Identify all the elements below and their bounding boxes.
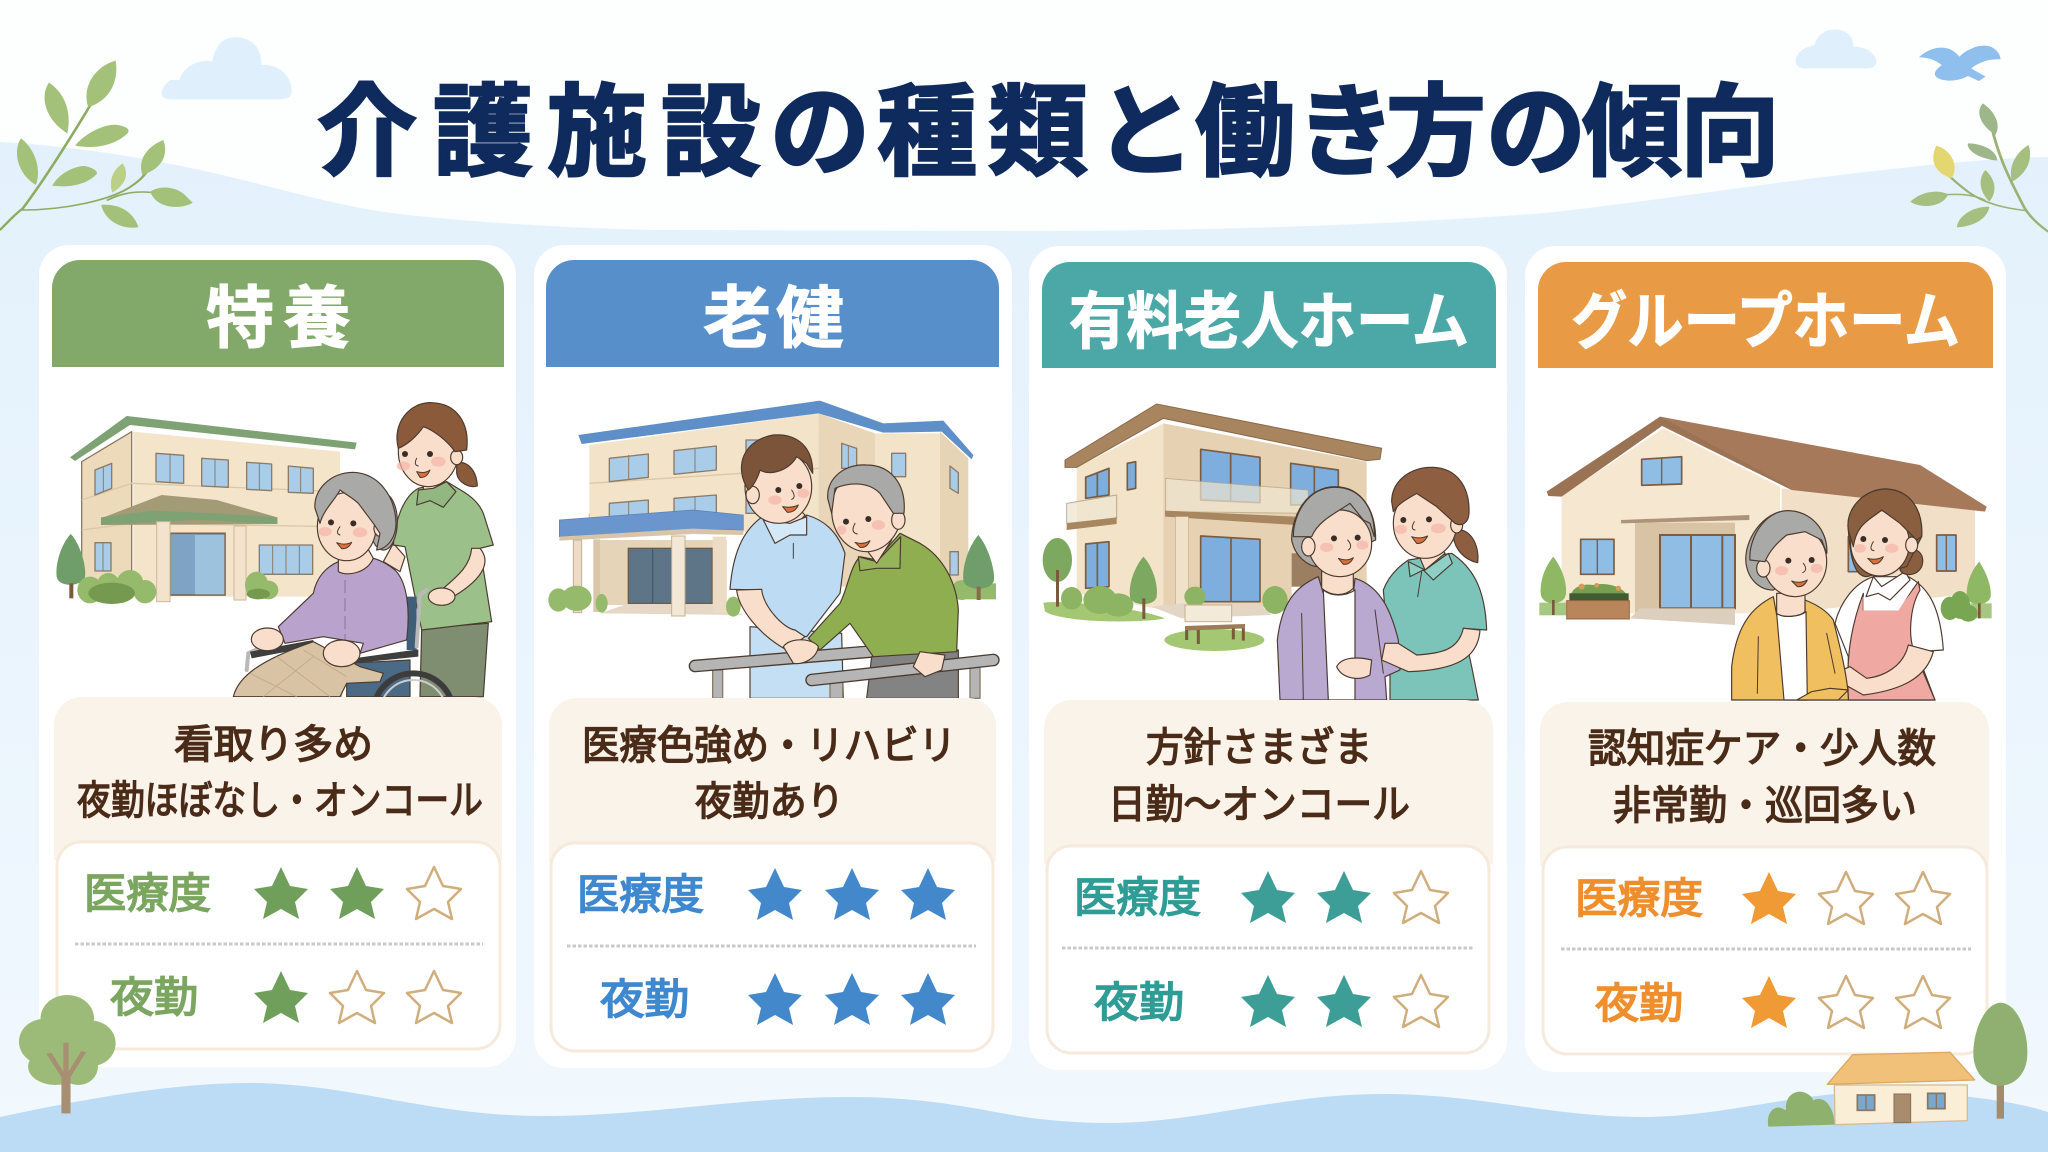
ratings: 老健: 医療度 — [577, 871, 704, 918]
description: 特養: 夜勤ほぼなし・オンコール — [77, 779, 483, 823]
icon: left branch — [0, 61, 193, 230]
panel: 老健 — [534, 245, 1012, 1068]
stars: 医療度 2/3 — [1241, 871, 1448, 923]
description: グループホーム — [1540, 702, 1989, 866]
heading: 有料老人ホーム: 有料老人ホーム — [1069, 288, 1469, 357]
description: グループホーム: 非常勤・巡回多い — [1613, 784, 1917, 828]
panel: グループホーム — [1525, 246, 2006, 1072]
icon: bird — [1919, 46, 2001, 81]
description: 有料老人ホーム — [1044, 700, 1493, 864]
title: 介護施設の種類と働き方の傾向 — [317, 77, 1780, 189]
stars: 医療度 2/3 — [254, 867, 461, 919]
illustration: 老健 building with therapist and elderly man — [548, 401, 996, 698]
heading: 特養 — [52, 260, 504, 367]
description: 有料老人ホーム: 日勤〜オンコール — [1108, 783, 1410, 827]
illustration: グループホーム house with caregiver and resident — [1539, 417, 1992, 700]
heading: 老健: 老健 — [703, 281, 844, 357]
stars: 夜勤 1/3 — [254, 971, 461, 1023]
heading: グループホーム — [1538, 262, 1993, 368]
ratings: グループホーム — [1543, 847, 1987, 1054]
heading: 老健 — [546, 260, 999, 367]
stars: 夜勤 3/3 — [748, 973, 955, 1025]
description: 老健: 医療色強め・リハビリ — [582, 724, 956, 768]
ratings: 有料老人ホーム: 医療度 — [1074, 874, 1201, 921]
ratings: 有料老人ホーム: 夜勤 — [1094, 979, 1184, 1026]
icon: left cloud — [162, 37, 292, 99]
stars: 夜勤 1/3 — [1742, 976, 1950, 1028]
description: 老健: 夜勤あり — [695, 780, 844, 824]
ratings: 特養 — [57, 842, 500, 1049]
ratings: 老健: 夜勤 — [600, 976, 689, 1023]
heading: グループホーム: グループホーム — [1571, 288, 1960, 357]
heading: 特養: 特養 — [206, 281, 351, 357]
icon: bottom-left tree — [19, 995, 116, 1113]
description: 有料老人ホーム: 方針さまざま — [1146, 726, 1372, 770]
description: 特養 — [54, 697, 502, 860]
stars: 医療度 3/3 — [748, 868, 955, 920]
description: 特養: 看取り多め — [174, 723, 373, 767]
icon: right cloud — [1796, 29, 1876, 68]
bottom wave — [0, 1083, 2048, 1152]
ratings: グループホーム: 夜勤 — [1595, 980, 1683, 1027]
panel: 有料老人ホーム — [1029, 246, 1507, 1070]
illustration: 有料老人ホーム building with caregiver and resident — [1043, 404, 1487, 700]
ratings: 有料老人ホーム — [1047, 846, 1489, 1053]
illustration: 特養 building with caregiver and wheelchair user — [56, 403, 493, 753]
stars: 夜勤 2/3 — [1241, 975, 1448, 1027]
ratings: 特養: 医療度 — [84, 870, 211, 917]
description: 老健 — [549, 698, 996, 862]
heading: 有料老人ホーム — [1042, 262, 1496, 368]
icon: bottom-right house, bush and tree — [1768, 1003, 2027, 1127]
ratings: 特養: 夜勤 — [110, 974, 198, 1021]
panel: 特養 — [39, 245, 516, 1067]
description: グループホーム: 認知症ケア・少人数 — [1588, 727, 1936, 771]
icon: right branch — [1910, 103, 2048, 232]
ratings: グループホーム: 医療度 — [1575, 875, 1703, 922]
ratings: 老健 — [551, 843, 993, 1051]
stars: 医療度 1/3 — [1742, 872, 1950, 924]
